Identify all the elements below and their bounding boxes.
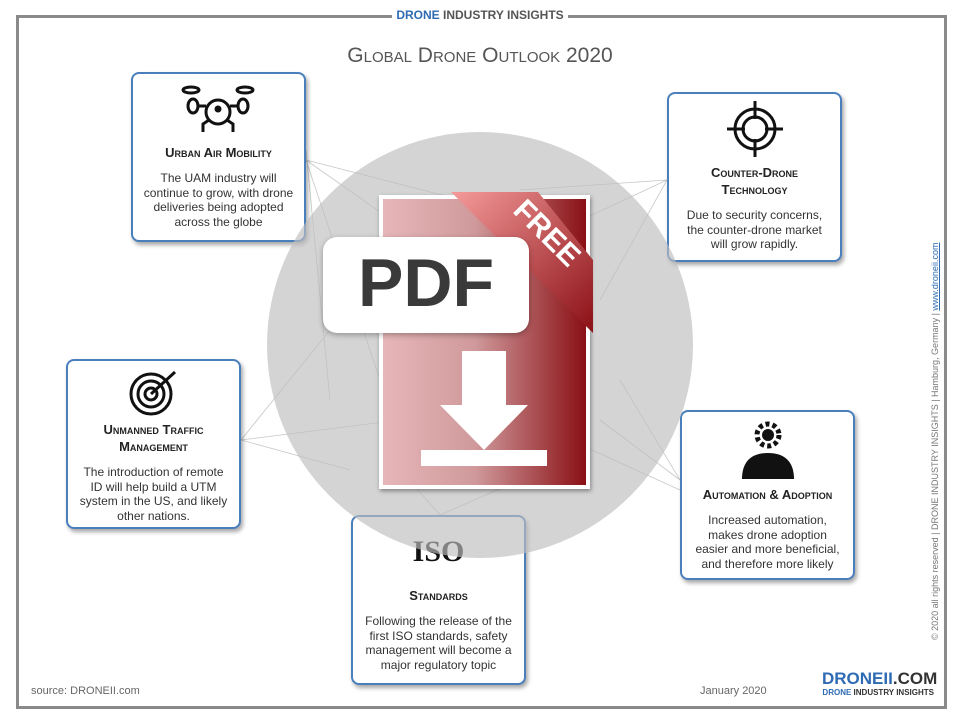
- panel: standards: Standards: [409, 588, 468, 603]
- panel: counter-drone: Due to security concerns, the counter-drone market will grow rapidly.: [687, 208, 822, 251]
- icon: radar: [130, 370, 176, 416]
- panel: counter-drone: Counter-Drone: [711, 165, 798, 180]
- date: January 2020: [700, 685, 767, 697]
- panel: urban air mobility: The UAM industry will continue to grow, with drone deliveries being adopted across the globe: [144, 171, 293, 228]
- panel: utm: [66, 359, 241, 529]
- panel: urban air mobility: [131, 72, 306, 242]
- panel: standards: [351, 515, 526, 685]
- title: Global Drone Outlook 2020: [347, 44, 613, 67]
- header label: DRONE INDUSTRY INSIGHTS: [396, 8, 564, 22]
- PDF download icon: FREE: [507, 193, 587, 273]
- icon: crosshair: [727, 101, 783, 157]
- panel: utm: Management: [119, 439, 188, 454]
- PDF download icon: PDF: [358, 245, 494, 321]
- panel: automation: Increased automation, makes drone adoption easier and more beneficial, and therefore more likely: [695, 513, 840, 570]
- icon: ISO: ISO: [413, 535, 464, 568]
- panel: standards: Following the release of the first ISO standards, safety management will become a major regulatory topic: [365, 614, 512, 672]
- panel: automation: [680, 410, 855, 580]
- panel: counter-drone: [667, 92, 842, 262]
- logo: DRONE INDUSTRY INSIGHTS: [822, 688, 934, 697]
- logo: [822, 669, 937, 697]
- source: source: DRONEII.com: [31, 685, 140, 697]
- central circle: [267, 132, 693, 558]
- icon: person with gear: [742, 422, 794, 479]
- copyright vertical: © 2020 all rights reserved | DRONE INDUSTRY INSIGHTS | Hamburg, Germany | www.droneii.com: [930, 243, 940, 640]
- panel: utm: Unmanned Traffic: [104, 422, 203, 437]
- logo: DRONEII.COM: [822, 669, 937, 688]
- panel: counter-drone: Technology: [722, 182, 787, 197]
- panel: utm: The introduction of remote ID will help build a UTM system in the US, and likely other nations.: [80, 465, 227, 522]
- panel: urban air mobility: Urban Air Mobility: [165, 145, 272, 160]
- panel: automation: Automation & Adoption: [703, 487, 832, 502]
- icon: drone: [182, 86, 254, 132]
